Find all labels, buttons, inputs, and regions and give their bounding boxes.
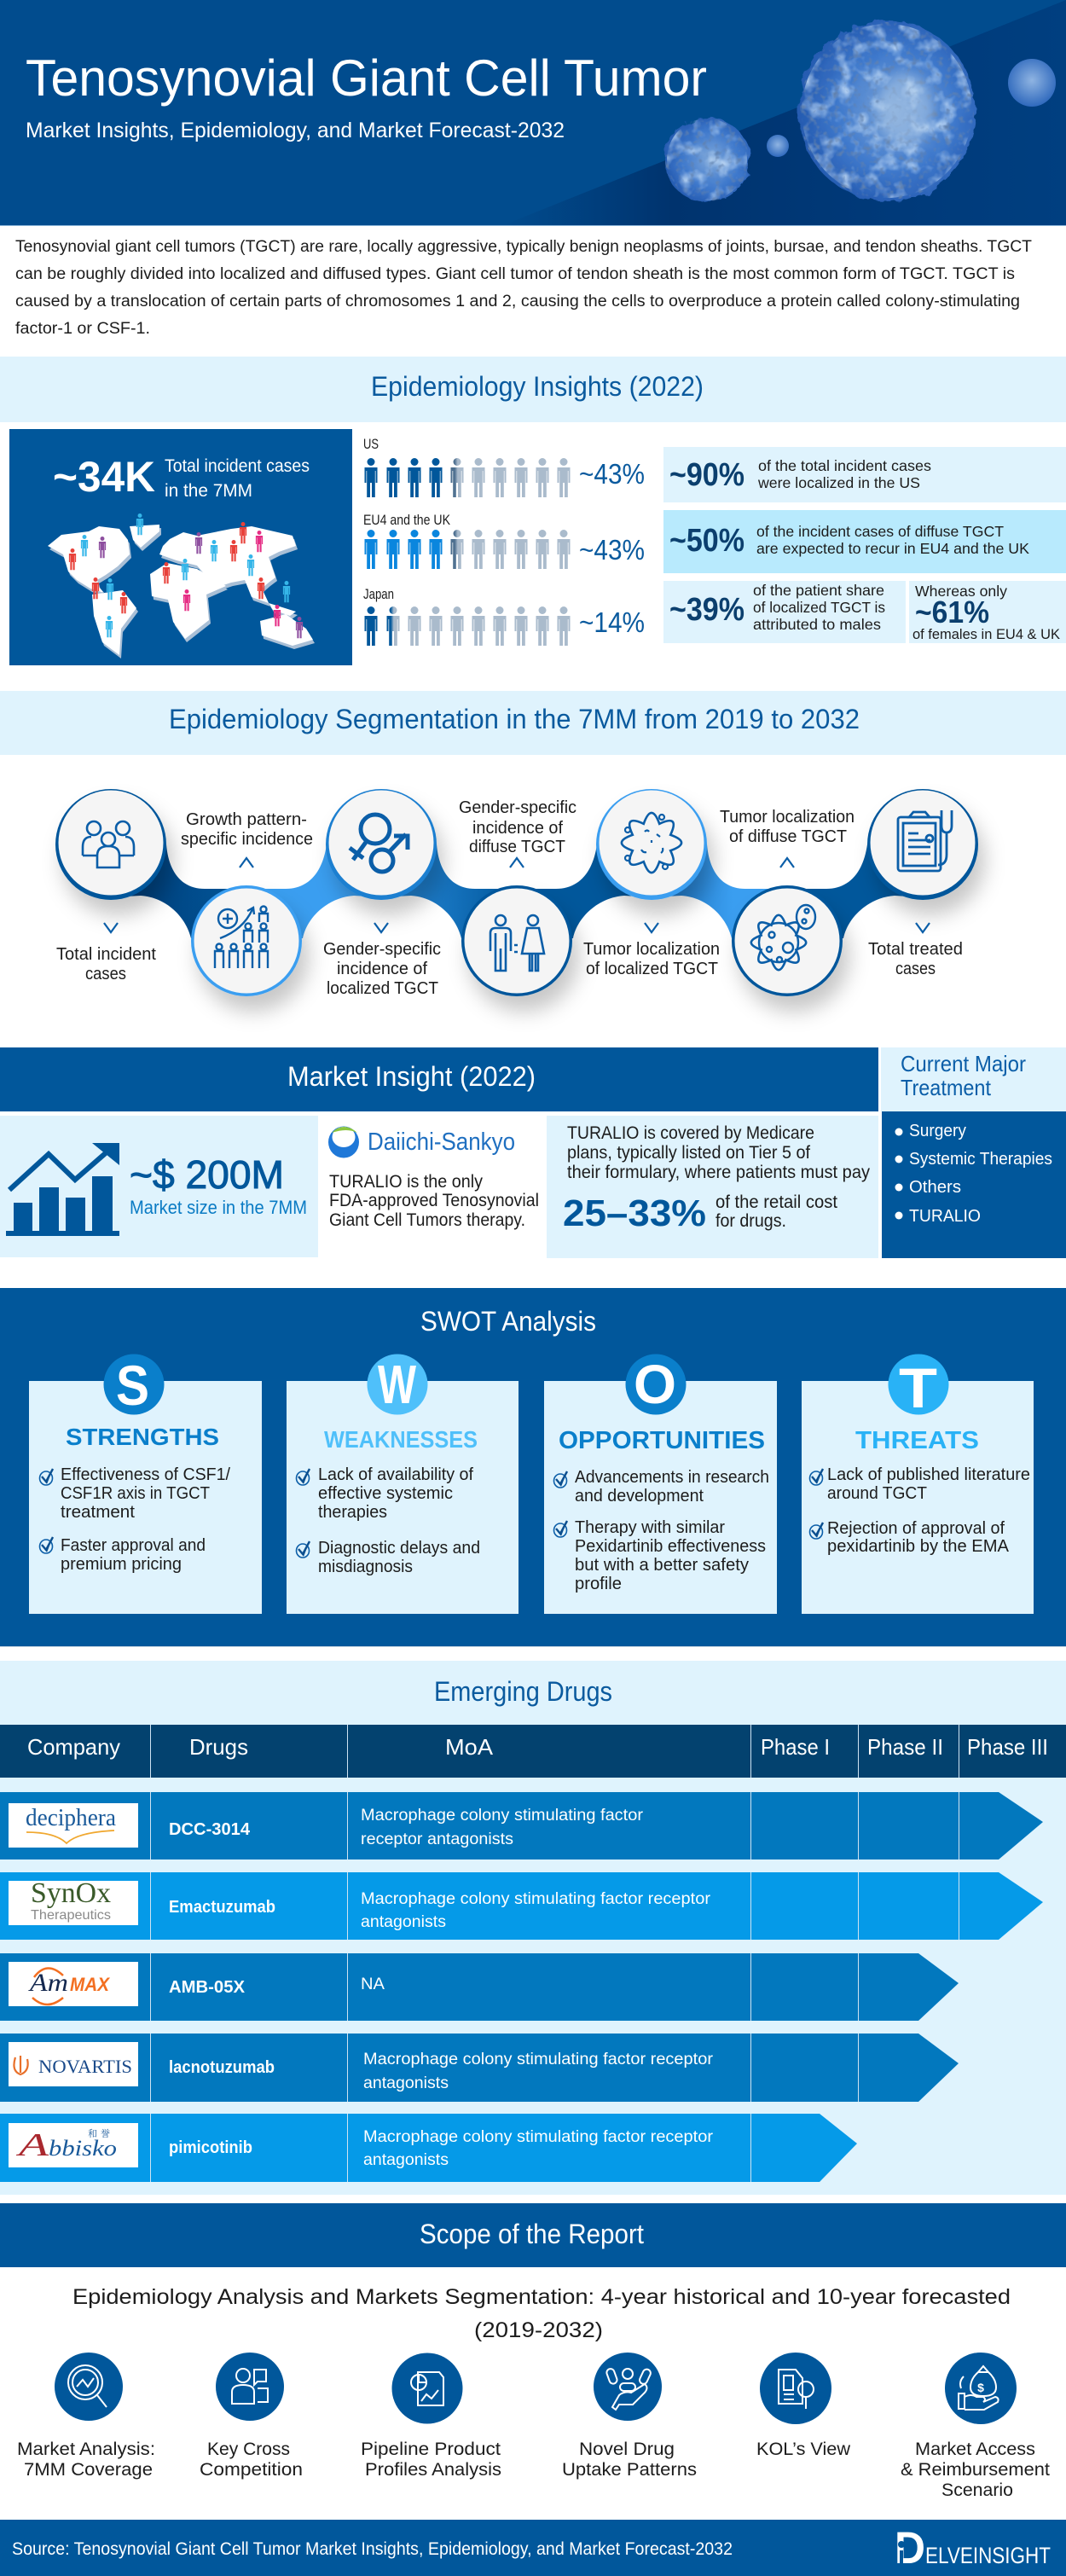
panel: current major treatment: TURALIO bbox=[909, 1207, 981, 1226]
row: Abbisko pimicotinib: Macrophage colony stimulating factor receptor bbox=[363, 2128, 714, 2146]
callout: 90 percent: were localized in the US bbox=[757, 474, 920, 491]
card: threats: pexidartinib by the EMA bbox=[827, 1536, 1009, 1556]
logo: Novartis: NOVARTIS bbox=[38, 2056, 132, 2077]
callout: 50 percent: of the incident cases of diffuse TGCT bbox=[756, 523, 1004, 540]
card: threats: Rejection of approval of bbox=[827, 1518, 1005, 1538]
hero banner bbox=[0, 0, 1066, 226]
label: gender-specific incidence of localized TGCT: localized TGCT bbox=[327, 979, 438, 998]
panel: current major treatment: Systemic Therapies bbox=[909, 1150, 1052, 1169]
card: opportunities: and development bbox=[575, 1486, 704, 1506]
heading: scope of the report: Scope of the Report bbox=[420, 2219, 644, 2249]
card: threats bbox=[802, 1355, 1034, 1614]
card: threats: T bbox=[899, 1356, 937, 1419]
card: opportunities: Advancements in research bbox=[575, 1467, 769, 1487]
row: Deciphera DCC-3014: Macrophage colony stimulating factor bbox=[361, 1807, 644, 1825]
callout: 90 percent: of the total incident cases bbox=[758, 457, 931, 474]
row: Deciphera DCC-3014 bbox=[0, 1792, 1043, 1859]
card: strengths: treatment bbox=[61, 1502, 135, 1522]
label: tumor localization of localized TGCT: Tumor localization bbox=[583, 940, 720, 959]
panel: current major treatment: Current Major bbox=[901, 1051, 1026, 1076]
pictogram: US share: ~43% bbox=[579, 458, 645, 490]
title: Tenosynovial Giant Cell Tumor bbox=[26, 49, 707, 107]
label: growth pattern-specific incidence bbox=[181, 810, 313, 849]
node: total treated cases bbox=[867, 789, 978, 900]
table header: Phase I bbox=[761, 1734, 830, 1760]
pictogram: EU4 and the UK share bbox=[363, 512, 645, 569]
logo: SynOx Therapeutics: SynOx bbox=[31, 1877, 111, 1909]
table header: MoA bbox=[445, 1734, 494, 1760]
panel: Medicare coverage: TURALIO is covered by Medicare bbox=[567, 1123, 814, 1143]
node: tumor localization of diffuse TGCT bbox=[732, 885, 843, 996]
heading: emerging drugs: Emerging Drugs bbox=[434, 1676, 612, 1707]
callout: 50 percent: ~50% bbox=[669, 523, 744, 559]
scope item: market access and reimbursement: Scenario bbox=[941, 2480, 1013, 2500]
panel: current major treatment: Others bbox=[909, 1178, 961, 1197]
callout: 39 percent males: of localized TGCT is bbox=[753, 599, 885, 616]
label: gender-specific incidence of diffuse TGCT: diffuse TGCT bbox=[469, 838, 565, 856]
label: tumor localization of diffuse TGCT bbox=[720, 808, 855, 846]
logo: Daiichi-Sankyo: Daiichi-Sankyo bbox=[368, 1128, 515, 1156]
callout: 61 percent females: ~61% bbox=[915, 595, 989, 629]
row: Novartis lacnotuzumab: lacnotuzumab bbox=[169, 2058, 275, 2077]
panel: SWOT analysis bbox=[0, 1288, 1066, 1647]
row: Abbisko pimicotinib: antagonists bbox=[363, 2151, 449, 2169]
card: weaknesses: Lack of availability of bbox=[318, 1465, 473, 1484]
pictogram: Japan share bbox=[363, 586, 645, 646]
pictogram: Japan share: ~14% bbox=[579, 606, 645, 638]
card: weaknesses: effective systemic bbox=[318, 1483, 453, 1503]
pictogram: Japan share: Japan bbox=[363, 586, 394, 602]
node: gender-specific incidence of diffuse TGCT bbox=[461, 885, 572, 996]
logo: Deciphera: deciphera bbox=[26, 1805, 117, 1831]
intro paragraph: factor-1 or CSF-1. bbox=[15, 320, 150, 338]
card: weaknesses: therapies bbox=[318, 1502, 387, 1522]
label: total incident cases: Total incident bbox=[56, 945, 156, 964]
scope item: KOL view: KOL’s View bbox=[756, 2440, 851, 2459]
label: tumor localization of diffuse TGCT: Tumor localization bbox=[720, 808, 855, 827]
logo: DelveInsight bbox=[895, 2523, 1051, 2573]
card: strengths: Faster approval and bbox=[61, 1535, 206, 1555]
panel: Medicare coverage bbox=[547, 1116, 878, 1258]
scope item: KOL view bbox=[756, 2353, 851, 2459]
panel: market size: ~$ 200M bbox=[130, 1152, 284, 1197]
panel: total incident cases with world map: in the 7MM bbox=[165, 481, 252, 501]
subtitle: Market Insights, Epidemiology, and Market Forecast-2032 bbox=[26, 119, 565, 142]
card: strengths: Effectiveness of CSF1/ bbox=[61, 1465, 230, 1484]
label: growth pattern-specific incidence: specific incidence bbox=[181, 830, 313, 849]
card: strengths: premium pricing bbox=[61, 1554, 182, 1574]
pictogram: US share: US bbox=[363, 436, 379, 452]
card: threats: around TGCT bbox=[827, 1483, 927, 1503]
row: Novartis lacnotuzumab: antagonists bbox=[363, 2074, 449, 2092]
chevrons bbox=[104, 858, 930, 932]
row: SynOx Emactuzumab: Macrophage colony stimulating factor receptor bbox=[361, 1890, 711, 1908]
card: threats: THREATS bbox=[855, 1427, 979, 1454]
footer bbox=[0, 2520, 1066, 2576]
node: total incident cases bbox=[55, 789, 166, 900]
logo: Novartis bbox=[9, 2042, 138, 2086]
row: AmMAX AMB-05X bbox=[0, 1953, 959, 2021]
card: strengths bbox=[29, 1354, 262, 1614]
intro paragraph: caused by a translocation of certain parts of chromosomes 1 and 2, causing the cells to overproduce a protein called colony-stimulating bbox=[15, 293, 1020, 310]
label: total treated cases bbox=[868, 940, 963, 978]
card: weaknesses: misdiagnosis bbox=[318, 1557, 413, 1576]
scope item: key cross competition: Competition bbox=[200, 2460, 303, 2480]
label: gender-specific incidence of localized TGCT bbox=[323, 940, 441, 998]
panel: Medicare coverage: of the retail cost bbox=[715, 1192, 837, 1212]
logo: DelveInsight: D bbox=[895, 2523, 925, 2573]
callout: 90 percent bbox=[663, 447, 1066, 502]
label: total treated cases: cases bbox=[895, 960, 936, 978]
panel: Medicare coverage: plans, typically listed on Tier 5 of bbox=[567, 1143, 810, 1163]
callout: 50 percent bbox=[663, 510, 1066, 573]
table header: Phase II bbox=[867, 1734, 943, 1760]
scope item: pipeline product profiles: Profiles Analysis bbox=[365, 2460, 501, 2480]
panel: Medicare coverage: their formulary, where patients must pay bbox=[567, 1163, 870, 1182]
panel: current major treatment: Treatment bbox=[901, 1075, 992, 1100]
row: Deciphera DCC-3014: receptor antagonists bbox=[361, 1830, 513, 1848]
label: total treated cases: Total treated bbox=[868, 940, 963, 959]
label: growth pattern-specific incidence: Growth pattern- bbox=[186, 810, 307, 829]
callout: 39 percent males: of the patient share bbox=[753, 582, 884, 599]
row: SynOx Emactuzumab: antagonists bbox=[361, 1913, 446, 1931]
scope item: market analysis: 7MM Coverage bbox=[24, 2460, 153, 2480]
row: SynOx Emactuzumab bbox=[0, 1872, 1043, 1940]
card: strengths: STRENGTHS bbox=[66, 1424, 219, 1450]
callout: 61 percent females: Whereas only bbox=[915, 583, 1007, 600]
label: tumor localization of diffuse TGCT: of diffuse TGCT bbox=[729, 827, 847, 846]
intro paragraph: Tenosynovial giant cell tumors (TGCT) are rare, locally aggressive, typically benign neoplasms of joints, bursae, and tendon sheaths. TGCT bbox=[15, 238, 1032, 256]
logo: Abbisko: 和誉 bbox=[88, 2128, 110, 2139]
icon: growth chart bbox=[6, 1143, 119, 1236]
scope item: key cross competition: Key Cross bbox=[207, 2440, 290, 2459]
intro paragraph bbox=[15, 238, 1032, 338]
heading: Market Insight: Market Insight (2022) bbox=[287, 1061, 536, 1092]
logo: SynOx Therapeutics bbox=[9, 1877, 138, 1925]
callout: 39 percent males bbox=[663, 581, 906, 643]
panel: Daiichi-Sankyo approved therapy: Giant Cell Tumors therapy. bbox=[329, 1210, 525, 1230]
row: Novartis lacnotuzumab: Macrophage colony stimulating factor receptor bbox=[363, 2051, 714, 2068]
pictogram: EU4 and the UK share: ~43% bbox=[579, 534, 645, 566]
row: Abbisko pimicotinib: pimicotinib bbox=[169, 2138, 252, 2157]
logo: Abbisko bbox=[9, 2123, 138, 2167]
table header: Company bbox=[27, 1734, 120, 1760]
card: weaknesses: Diagnostic delays and bbox=[318, 1538, 480, 1558]
table header: Phase III bbox=[967, 1734, 1048, 1760]
scope item: novel drug uptake bbox=[562, 2353, 697, 2480]
panel: Daiichi-Sankyo approved therapy: TURALIO is the only bbox=[329, 1172, 483, 1192]
scope item: market analysis: Market Analysis: bbox=[17, 2440, 155, 2459]
node: gender-specific incidence of localized TGCT bbox=[326, 789, 437, 900]
panel: SWOT analysis: SWOT Analysis bbox=[420, 1306, 596, 1337]
intro paragraph: can be roughly divided into localized and diffused types. Giant cell tumor of tendon sheath is the most common form of TGCT. TGCT is bbox=[15, 265, 1015, 283]
label: total incident cases: cases bbox=[85, 965, 126, 983]
scope item: pipeline product profiles bbox=[361, 2353, 501, 2480]
wave connector bbox=[111, 844, 922, 941]
row: Deciphera DCC-3014: DCC-3014 bbox=[169, 1820, 251, 1839]
callout: 39 percent males: ~39% bbox=[669, 592, 744, 628]
node: growth pattern-specific incidence bbox=[191, 885, 302, 996]
logo: Daiichi-Sankyo bbox=[328, 1126, 515, 1158]
label: gender-specific incidence of diffuse TGCT bbox=[459, 798, 576, 856]
heading: Epidemiology Segmentation: Epidemiology Segmentation in the 7MM from 2019 to 2032 bbox=[169, 704, 860, 734]
label: tumor localization of localized TGCT: of localized TGCT bbox=[586, 960, 718, 978]
table header: Drugs bbox=[189, 1734, 248, 1760]
scope subtitle: (2019-2032) bbox=[474, 2318, 603, 2342]
scope item: market access and reimbursement: Market Access bbox=[915, 2440, 1035, 2459]
pictogram: US share bbox=[363, 436, 645, 497]
panel: Daiichi-Sankyo approved therapy: FDA-approved Tenosynovial bbox=[329, 1191, 539, 1210]
card: opportunities: O bbox=[634, 1354, 676, 1415]
logo: Abbisko: bbisko bbox=[49, 2136, 117, 2161]
pictogram: EU4 and the UK share: EU4 and the UK bbox=[363, 512, 451, 528]
row: Abbisko pimicotinib bbox=[0, 2114, 857, 2182]
logo: SynOx Therapeutics: Therapeutics bbox=[31, 1908, 111, 1923]
panel: emerging drugs bbox=[0, 1661, 1066, 2195]
heading: Epidemiology Insights bbox=[0, 357, 1066, 422]
panel: total incident cases with world map: ~34K bbox=[53, 453, 155, 501]
panel: Daiichi-Sankyo approved therapy bbox=[328, 1126, 539, 1230]
heading: Epidemiology Segmentation bbox=[0, 691, 1066, 755]
node: tumor localization of localized TGCT bbox=[596, 789, 707, 900]
card: strengths: CSF1R axis in TGCT bbox=[61, 1483, 210, 1503]
panel: Medicare coverage: for drugs. bbox=[715, 1211, 786, 1231]
card: strengths: S bbox=[116, 1354, 149, 1417]
card: opportunities bbox=[544, 1354, 777, 1614]
callout: 61 percent females: of females in EU4 & UK bbox=[912, 626, 1061, 642]
scope item: market access and reimbursement: $ bbox=[977, 2381, 984, 2394]
panel: market size: Market size in the 7MM bbox=[130, 1197, 307, 1218]
heading: Market Insight bbox=[0, 1047, 878, 1111]
card: opportunities: but with a better safety bbox=[575, 1555, 750, 1575]
label: gender-specific incidence of diffuse TGCT: Gender-specific bbox=[459, 798, 576, 817]
card: weaknesses: WEAKNESSES bbox=[324, 1426, 478, 1453]
row: Novartis lacnotuzumab bbox=[0, 2034, 959, 2102]
scope item: novel drug uptake: Novel Drug bbox=[579, 2440, 675, 2459]
chart: segmentation wave flow bbox=[55, 789, 978, 998]
logo: Deciphera bbox=[9, 1803, 138, 1848]
callout: 61 percent females bbox=[909, 581, 1066, 643]
row: AmMAX AMB-05X: AMB-05X bbox=[169, 1978, 246, 1997]
scope subtitle: Epidemiology Analysis and Markets Segmentation: 4-year historical and 10-year forecasted bbox=[72, 2285, 1011, 2309]
scope item: market access and reimbursement bbox=[901, 2353, 1050, 2500]
illustration: tumor cells bbox=[664, 20, 1056, 202]
logo: Abbisko: A bbox=[14, 2127, 49, 2163]
label: tumor localization of localized TGCT bbox=[583, 940, 720, 978]
row: SynOx Emactuzumab: Emactuzumab bbox=[169, 1898, 275, 1917]
label: total incident cases bbox=[56, 945, 156, 983]
card: weaknesses bbox=[287, 1354, 519, 1614]
scope item: market analysis bbox=[17, 2353, 155, 2480]
panel: current major treatment: Surgery bbox=[909, 1122, 966, 1140]
panel: total incident cases with world map bbox=[9, 429, 352, 665]
source note: Source: Tenosynovial Giant Cell Tumor Market Insights, Epidemiology, and Market Forecast-2032 bbox=[12, 2539, 733, 2559]
card: opportunities: OPPORTUNITIES bbox=[559, 1427, 765, 1454]
panel: current major treatment bbox=[881, 1047, 1066, 1258]
scope item: market access and reimbursement: & Reimbursement bbox=[901, 2460, 1050, 2480]
card: threats: Lack of published literature bbox=[827, 1465, 1030, 1484]
card: opportunities: Pexidartinib effectiveness bbox=[575, 1536, 766, 1556]
heading: Epidemiology Insights: Epidemiology Insights (2022) bbox=[371, 371, 704, 402]
label: gender-specific incidence of localized TGCT: Gender-specific bbox=[323, 940, 441, 959]
logo: AmMAX bbox=[9, 1962, 138, 2006]
card: weaknesses: W bbox=[378, 1354, 416, 1415]
callout: 90 percent: ~90% bbox=[669, 457, 744, 493]
panel: Medicare coverage: 25–33% bbox=[563, 1192, 706, 1234]
world map bbox=[48, 513, 315, 659]
card: opportunities: profile bbox=[575, 1574, 622, 1593]
scope item: key cross competition bbox=[200, 2353, 303, 2480]
callout: 39 percent males: attributed to males bbox=[753, 616, 881, 633]
table header bbox=[0, 1725, 1066, 1778]
row: AmMAX AMB-05X: NA bbox=[361, 1976, 385, 1993]
scope subtitle bbox=[72, 2285, 1011, 2342]
logo: AmMAX: MAX bbox=[70, 1974, 110, 1995]
callout: 50 percent: are expected to recur in EU4 and the UK bbox=[756, 540, 1029, 557]
scope item: novel drug uptake: Uptake Patterns bbox=[562, 2460, 697, 2480]
label: gender-specific incidence of localized TGCT: incidence of bbox=[337, 960, 427, 978]
card: opportunities: Therapy with similar bbox=[575, 1517, 725, 1537]
panel: market size bbox=[0, 1116, 318, 1257]
scope item: pipeline product profiles: Pipeline Product bbox=[361, 2440, 501, 2459]
heading: scope of the report bbox=[0, 2203, 1066, 2267]
logo: AmMAX: Am bbox=[28, 1969, 68, 1997]
label: gender-specific incidence of diffuse TGCT: incidence of bbox=[472, 819, 563, 838]
panel: total incident cases with world map: Total incident cases bbox=[165, 456, 310, 476]
